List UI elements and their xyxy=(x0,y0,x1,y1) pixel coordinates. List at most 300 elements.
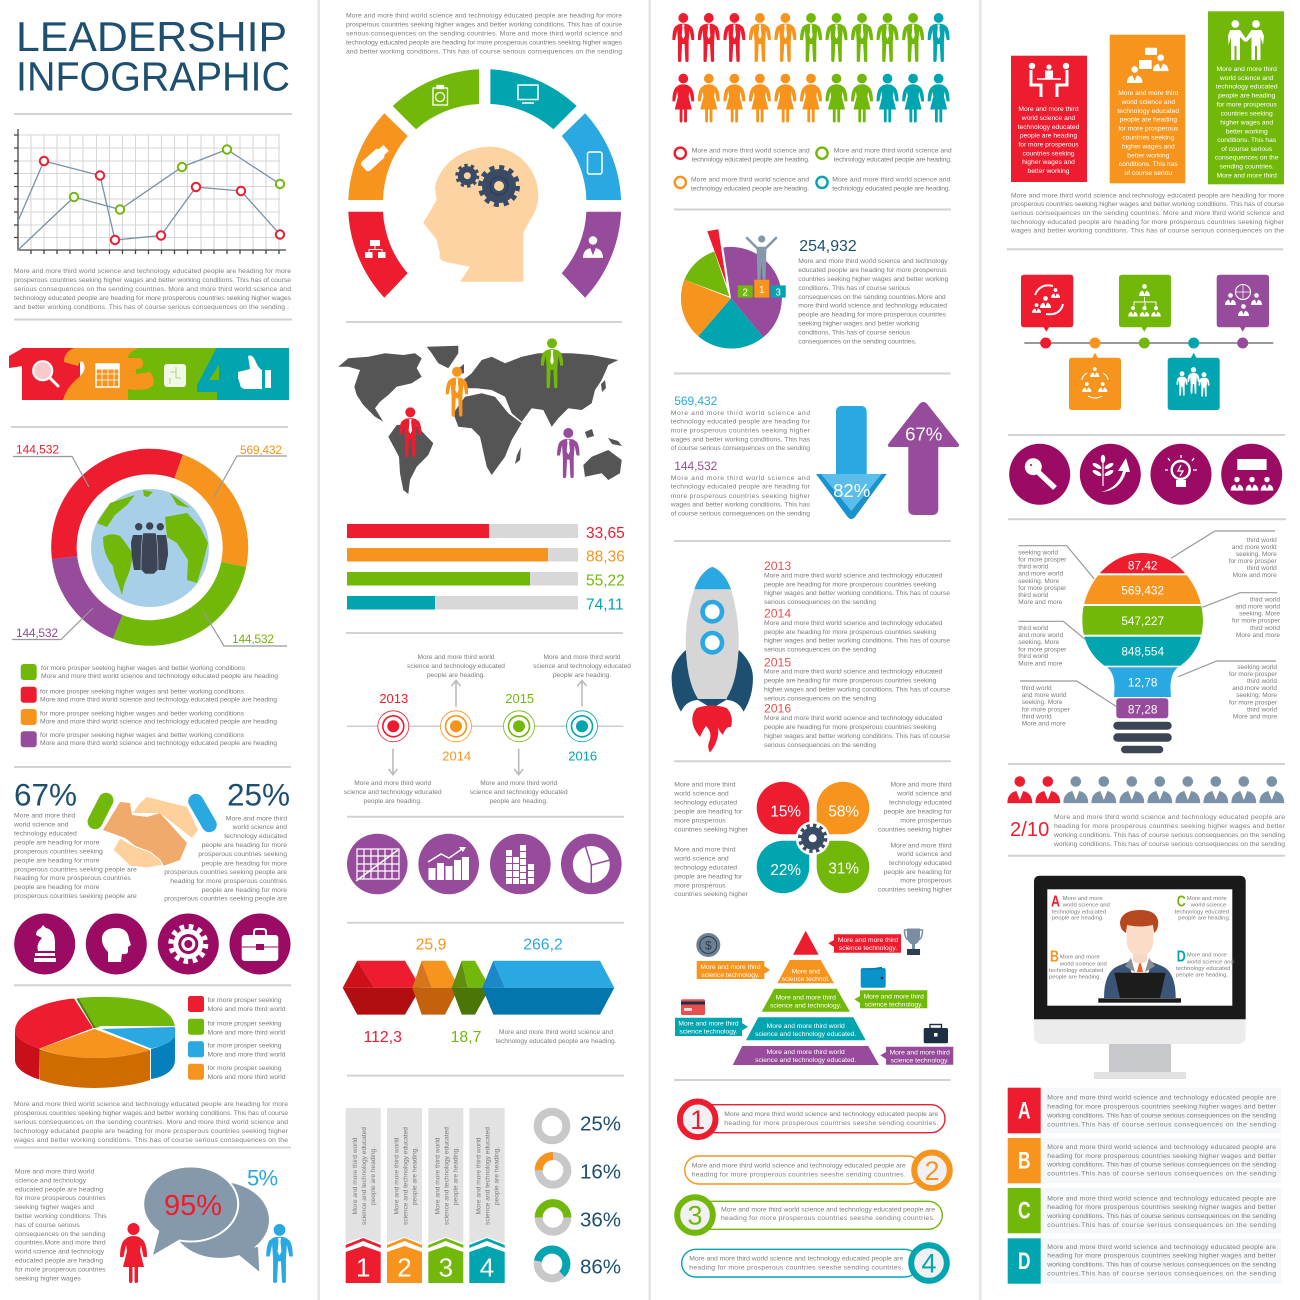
row A: countries.This has of course serious consequences on the sending xyxy=(1047,1121,1276,1128)
bar chart: 88,36 xyxy=(586,548,625,566)
flower chart: more prosperous xyxy=(900,817,952,824)
screen letters: A xyxy=(1051,894,1060,911)
text block: right: technology educated xyxy=(224,833,287,840)
row C: working conditions. This has of course serious consequences on the sending xyxy=(1046,1213,1276,1220)
legend: More and more third world science and technology educated people are heading xyxy=(41,673,278,680)
pie legend: More and more third world xyxy=(208,1052,286,1058)
card: orange: higher wages and xyxy=(1122,143,1175,150)
icon: credit card xyxy=(681,999,705,1015)
card: red: countries seeking xyxy=(1022,151,1075,158)
icon: briefcase xyxy=(924,1024,948,1043)
text block: right: people are heading for more xyxy=(202,860,287,867)
card: green: sending countries. xyxy=(1220,164,1274,171)
numbered vertical banners: science and technology educated xyxy=(485,1127,492,1225)
numbered vertical banners: science and technology educated xyxy=(444,1127,451,1225)
icon: red person xyxy=(399,407,422,457)
pyramid: More and more third xyxy=(776,994,836,1001)
timeline: More and more third world xyxy=(480,780,558,787)
text block: chart description: More and more third world science and technology educated people are heading for more xyxy=(14,268,291,275)
text block: 569,432 and 144,532: more prosperous countries seeking higher xyxy=(671,428,811,434)
donut chart with globe xyxy=(12,442,287,646)
text: left notes: for more prosper xyxy=(1018,585,1067,592)
card: green: More and more third xyxy=(1217,173,1277,180)
timeline: people are heading. xyxy=(364,798,422,805)
text: right notes: for more prosper xyxy=(1229,671,1278,678)
legend: for more prosper seeking higher wages and better working conditions xyxy=(41,665,246,672)
screen notes: More and more xyxy=(1187,953,1227,959)
icon: clipboard xyxy=(433,86,448,105)
text block: cards description xyxy=(1010,192,1285,235)
text block: 569,432 and 144,532: technology educated people are heading for xyxy=(671,419,811,426)
icon: chess knight xyxy=(14,914,75,974)
card: green: world science and xyxy=(1219,75,1274,82)
pill 2 xyxy=(685,1152,950,1188)
pill 4 xyxy=(682,1245,947,1281)
legend rings: More and more third world science and xyxy=(691,177,809,184)
text block: 254,932: consequences on the sending countries. xyxy=(798,338,917,345)
stat: 2/10: 2/10 xyxy=(1010,819,1049,841)
flower chart: world science and xyxy=(673,791,729,798)
text block: 569,432 and 144,532: More and more third world science and xyxy=(671,475,810,482)
text block: pie description: technology educated people are heading for more prosperous countries seeking higher xyxy=(14,1128,289,1135)
pill 3 xyxy=(677,1197,942,1233)
timeline xyxy=(344,654,631,805)
card: green: More and more third xyxy=(1217,66,1277,73)
box: teal men xyxy=(1168,353,1220,410)
row B: More and more third world science and technology educated people are xyxy=(1047,1144,1276,1151)
numbered vertical banners: More and more third world xyxy=(476,1137,483,1214)
panel: column 2 xyxy=(338,12,631,1283)
icon: wallet xyxy=(861,967,886,988)
text block: speech section: for more prosperous countries xyxy=(15,1266,106,1273)
text block: speech section: consequences on the sending xyxy=(15,1231,106,1238)
screen notes: More and more xyxy=(1060,955,1100,961)
text block: cards description: wages and better working conditions. This has of course serious consequences on the xyxy=(1010,228,1284,235)
icon: gear xyxy=(796,821,830,855)
text block: cards description: prosperous countries seeking higher wages and better working conditions. This has of course xyxy=(1011,201,1284,208)
flower chart: people are heading for xyxy=(674,808,743,815)
screen notes: people are heading. xyxy=(1052,916,1104,922)
icon: idea bulb xyxy=(1150,444,1212,505)
panel: column 4 xyxy=(1007,11,1286,1284)
legend: More and more third world science and technology educated people are heading xyxy=(40,718,277,725)
screen notes: technology educated xyxy=(1052,909,1106,915)
bar chart: 55,22 xyxy=(586,572,625,590)
pyramid: More and xyxy=(792,968,820,975)
3d pie chart xyxy=(15,997,175,1088)
text block: right: heading for more prosperous countries xyxy=(170,878,288,885)
light bulb chart: 12,78 xyxy=(1128,676,1158,690)
pill 1: heading for more prosperous countries seeshe sending countries. xyxy=(724,1120,938,1127)
card: green: higher wages and xyxy=(1220,119,1273,126)
icon: briefcase xyxy=(230,914,290,974)
row D: working conditions. This has of course serious consequences on the sending xyxy=(1046,1262,1276,1269)
card: red: for more prosperous xyxy=(1018,142,1079,149)
text block: right: More and more third xyxy=(226,815,287,822)
text block: 569,432 and 144,532: wages and better working conditions. This has xyxy=(670,436,811,443)
box: green hierarchy xyxy=(1119,275,1171,332)
card: red: technology educated xyxy=(1018,124,1080,131)
text block: 569,432 and 144,532: 144,532 xyxy=(674,459,718,473)
screen notes: technology educated xyxy=(1175,909,1229,915)
numbered vertical banners: people are heading. xyxy=(411,1147,418,1205)
row D: D xyxy=(1018,1248,1030,1275)
row B: working conditions. This has of course serious consequences on the sending xyxy=(1046,1162,1276,1169)
flower chart: more prosperous xyxy=(674,817,726,824)
text: left notes: third world xyxy=(1018,653,1049,660)
bar chart xyxy=(347,524,625,614)
pie legend: for more prosper seeking xyxy=(208,1042,282,1050)
pie legend: More and more third world xyxy=(208,1074,286,1081)
pill 3: 3 xyxy=(687,1201,703,1231)
pie legend: for more prosper seeking xyxy=(208,997,282,1004)
text: left notes: for more prosper xyxy=(1018,646,1067,654)
row C: C xyxy=(1018,1198,1030,1225)
light bulb chart: 848,554 xyxy=(1121,645,1164,659)
tags: More and more third xyxy=(838,937,898,944)
text block: year milestones: serious consequences on the sending xyxy=(764,647,876,654)
pyramid: More and more third world xyxy=(767,1049,845,1056)
screen notes: people are heading. xyxy=(1049,975,1101,981)
numbered vertical banners: More and more third world xyxy=(435,1137,442,1214)
row B xyxy=(1008,1138,1281,1183)
text block: chart description: technology educated people are heading for more prosperous countries seeking higher wages xyxy=(14,295,292,302)
text block: right: prosperous countries seeking xyxy=(198,851,287,858)
text block: pie description: More and more third world science and technology educated people are heading for more xyxy=(14,1101,288,1108)
icon: monitor xyxy=(518,85,538,103)
legend rings xyxy=(675,147,952,192)
text block: speech section: for more prosperous countries xyxy=(15,1195,106,1202)
icon: plant with arrow xyxy=(1080,444,1141,505)
3d arrow chart: 25,9 xyxy=(416,936,447,953)
icon row: magenta circles xyxy=(1009,444,1282,505)
timeline: science and technology educated xyxy=(533,663,631,670)
card: orange: conditions. This has xyxy=(1119,161,1178,168)
text block: intro: and better working conditions. This has of course serious consequences on the sending xyxy=(346,48,622,55)
3d arrow chart: More and more third world science and xyxy=(499,1029,613,1036)
title xyxy=(16,13,290,100)
text: right notes: for more prosper xyxy=(1229,558,1278,565)
text block: speech section: seeking higher wages and xyxy=(15,1204,94,1211)
flower chart: 31% xyxy=(828,860,859,877)
screen notes: technology educated xyxy=(1176,966,1230,972)
flower chart: technology educated xyxy=(889,800,952,807)
text block: speech section: science and technology xyxy=(15,1177,87,1184)
timeline: people are heading. xyxy=(553,672,611,679)
3d arrow chart: 18,7 xyxy=(451,1029,481,1046)
text: right notes: seeking. More xyxy=(1239,610,1280,618)
text block: cards description: More and more third world science and technology educated people are heading for more xyxy=(1011,192,1284,199)
numbered vertical banners: science and technology educated xyxy=(402,1127,409,1225)
row A: A xyxy=(1018,1098,1030,1124)
icon: bars with arrow xyxy=(418,834,479,894)
card: green: people are heading xyxy=(1218,93,1276,100)
legend: for more prosper seeking higher wages and better working conditions xyxy=(40,732,245,739)
bar chart: 33,65 xyxy=(586,525,625,542)
icon: puzzle xyxy=(164,364,186,387)
pill 4: heading for more prosperous countries seeshe sending countries. xyxy=(689,1264,903,1271)
numbered vertical banners: More and more third world xyxy=(393,1137,400,1214)
card: red: better working xyxy=(1027,168,1070,175)
timeline: More and more third world xyxy=(354,780,432,787)
3d arrow chart: technology educated people are heading. xyxy=(496,1038,617,1045)
text block: intro: serious consequences on the sending countries. More and more third world science and xyxy=(346,30,622,38)
text block: year milestones: people are heading for more prosperous countries seeking xyxy=(764,581,937,588)
legend: for more prosper seeking higher wages and better working conditions xyxy=(40,689,245,696)
text block: speech section: educated people are heading xyxy=(15,1258,103,1264)
text block: year milestones: 2016 xyxy=(764,702,791,716)
light bulb chart: 569,432 xyxy=(1121,583,1164,597)
callouts: 144,532 xyxy=(16,626,58,640)
numbered vertical banners: people are heading. xyxy=(370,1147,377,1205)
flower chart: more prosperous xyxy=(900,878,952,885)
tags: science technology. xyxy=(679,1029,738,1036)
text block: intro: technology educated people are heading for more prosperous countries seeking higher wages xyxy=(346,39,623,46)
speech bubbles xyxy=(143,1166,278,1272)
pill 3: More and more third world science and technology educated people are xyxy=(721,1206,935,1213)
flower chart: countries seeking higher xyxy=(674,826,749,833)
flower chart: countries seeking higher xyxy=(878,826,952,833)
icon: magnifier xyxy=(33,361,58,386)
text block: speech section: better working conditions. This xyxy=(15,1213,107,1220)
flower chart: countries seeking higher xyxy=(878,887,952,894)
flower chart: More and more third xyxy=(674,782,736,789)
numbered vertical banners: 2 xyxy=(397,1252,412,1282)
pill 1 xyxy=(680,1102,945,1137)
stat: 2/10: More and more third world science and technology educated people are xyxy=(1054,814,1285,821)
arrows xyxy=(388,680,586,775)
row A xyxy=(1008,1088,1281,1133)
stat: 2/10 xyxy=(1010,814,1286,848)
flower chart: 15% xyxy=(770,804,801,821)
icon: man xyxy=(266,1224,293,1283)
3d arrow chart: 112,3 xyxy=(364,1029,402,1046)
text: left notes: seeking. More xyxy=(1018,578,1060,585)
card: green: countries seeking xyxy=(1221,110,1273,117)
icon: winner on podium: 1 xyxy=(759,285,765,296)
flower chart: countries seeking higher xyxy=(674,891,749,898)
tags: science technology. xyxy=(865,1002,923,1008)
text block: year milestones: serious consequences on the sending xyxy=(764,599,876,606)
flower chart xyxy=(673,782,952,898)
pyramid: science and technology. xyxy=(770,1002,841,1009)
screen notes xyxy=(1049,896,1234,981)
row B: B xyxy=(1018,1148,1030,1175)
pill 2: 2 xyxy=(924,1156,940,1186)
text block: chart description: prosperous countries seeking higher wages and better working conditions. This has of course xyxy=(14,277,291,284)
icon: orange person xyxy=(446,367,468,417)
stat: 2/10: heading for more prosperous countries seeking higher wages and better xyxy=(1054,823,1286,830)
text block: year milestones: 2013 xyxy=(764,559,791,573)
screen notes: people are heading. xyxy=(1178,916,1231,922)
pill 2: More and more third world science and technology educated people are xyxy=(692,1162,906,1169)
screen letters: D xyxy=(1177,949,1186,966)
tags: science technology. xyxy=(891,1058,949,1065)
text: left notes: and more world xyxy=(1022,692,1067,699)
light bulb chart: 87,42 xyxy=(1128,558,1157,572)
numbered vertical banners: 4 xyxy=(480,1252,494,1282)
text: left notes: third world xyxy=(1022,685,1052,692)
legend rings: More and more third world science and xyxy=(834,147,952,154)
timeline: 2016 xyxy=(568,748,597,763)
text: right notes: third world xyxy=(1247,565,1277,572)
pyramid: science and technology educated. xyxy=(755,1031,856,1038)
text: left notes: More and more xyxy=(1022,720,1066,728)
pill 3: heading for more prosperous countries seeshe sending countries. xyxy=(721,1215,935,1222)
row C xyxy=(1008,1188,1281,1233)
icon: presentation xyxy=(1221,444,1282,505)
legend: More and more third world science and technology educated people are heading xyxy=(40,740,277,747)
icon: handshake xyxy=(85,790,219,868)
text: left notes: seeking. More xyxy=(1018,639,1060,646)
text block: 569,432 and 144,532 xyxy=(670,394,811,518)
text: right notes: More and more xyxy=(1236,632,1280,639)
arrow: purple up 67%: 67% xyxy=(905,424,942,445)
icon: green person xyxy=(541,338,563,388)
arrow: purple up 67% xyxy=(888,402,959,515)
panel: handshake stats: 25% xyxy=(227,777,290,813)
numbered ribbon 1 2 3 4 xyxy=(9,348,289,400)
pie legend: More and more third world xyxy=(208,1006,286,1013)
text: right notes: seeking world xyxy=(1237,664,1277,671)
text block: intro: More and more third world science and technology educated people are heading for more xyxy=(346,12,622,20)
icon: globe xyxy=(91,489,209,607)
card: orange: technology educated xyxy=(1117,108,1179,115)
flower chart: More and more third xyxy=(890,842,952,849)
card: red: higher wages and xyxy=(1022,159,1075,166)
screen notes: world science and xyxy=(1059,961,1107,967)
text block: pie description: wages and better working conditions. This has of course serious consequences on the xyxy=(13,1137,288,1144)
icon: coin: $ xyxy=(705,938,712,952)
text block: speech section: More and more third world xyxy=(15,1168,95,1176)
text: left notes: More and more xyxy=(1018,660,1063,668)
icon: grid chart xyxy=(347,834,408,894)
text block: chart description: and better working conditions. This has of course serious consequences on the sending . xyxy=(14,304,289,311)
title: LEADERSHIP xyxy=(16,13,287,60)
pie legend: for more prosper seeking xyxy=(208,1020,282,1028)
pyramid: science and technology educated. xyxy=(755,1057,856,1064)
text: left notes xyxy=(1018,550,1071,728)
text: left notes: third world xyxy=(1022,714,1052,720)
timeline: science and technology educated xyxy=(344,789,442,796)
text block: 254,932: 254,932 xyxy=(799,238,857,255)
box: purple brain team xyxy=(1217,275,1269,332)
text block: cards description: technology educated people are heading for more prosperous countries seeking higher xyxy=(1011,219,1285,226)
icon: calendar xyxy=(96,364,119,387)
text block: chart description xyxy=(14,268,292,311)
title: INFOGRAPHIC xyxy=(16,54,290,100)
pictogram: women xyxy=(672,74,950,123)
text block: year milestones: higher wages and better working conditions. This has of course xyxy=(764,590,950,597)
card: red: people are heading xyxy=(1020,133,1077,140)
flower chart: world science and xyxy=(673,856,729,863)
panel: column 1 xyxy=(9,13,293,1283)
pictogram: 2 of 10 people xyxy=(1007,776,1284,803)
text: left notes: for more prosper xyxy=(1022,706,1071,714)
tags: More and more third xyxy=(864,994,924,1000)
screen notes: world science and xyxy=(1062,903,1110,909)
legend rings: More and more third world science and xyxy=(832,177,951,184)
icon: winner on podium: 3 xyxy=(775,288,781,298)
card: orange: people are heading xyxy=(1120,117,1177,124)
card: red xyxy=(1011,56,1087,182)
text block: year milestones: higher wages and better working conditions. This has of course xyxy=(764,638,950,645)
icon: gear xyxy=(158,914,219,974)
text block: speech section: world science and technology xyxy=(14,1249,105,1256)
pill 4: More and more third world science and technology educated people are xyxy=(689,1255,904,1262)
card: green: conditions. This has xyxy=(1217,137,1277,144)
text block: cards description: serious consequences on the sending countries. More and more third world science and xyxy=(1011,210,1284,217)
text block: right: world science and xyxy=(232,824,287,831)
text: right notes: and more world xyxy=(1235,604,1280,610)
icon: winner on podium xyxy=(738,235,786,298)
pill 4: 4 xyxy=(921,1249,937,1279)
card: orange: of course seriou xyxy=(1125,170,1172,177)
screen notes: More and more xyxy=(1187,896,1227,902)
callouts: 144,532 xyxy=(16,442,59,456)
legend: More and more third world science and technology educated people are heading xyxy=(40,697,277,704)
timeline: More and more third world xyxy=(418,654,495,661)
panel: handshake stats: 67% xyxy=(14,777,77,813)
ring diagram with head xyxy=(348,69,621,298)
flower chart: More and more third xyxy=(890,782,952,789)
text block: speech section: educated people are heading xyxy=(15,1186,103,1193)
light bulb chart: 547,227 xyxy=(1121,614,1164,628)
panel: column 3 xyxy=(670,13,959,1281)
legend rings: technology educated people are heading. xyxy=(691,186,809,192)
icon: winner on podium: 2 xyxy=(742,288,748,298)
numbered vertical banners: 3 xyxy=(439,1252,453,1282)
leader lines xyxy=(1018,531,1277,707)
text block: year milestones: people are heading for more prosperous countries seeking xyxy=(764,724,937,731)
percent donuts: 16% xyxy=(580,1161,621,1184)
text block: year milestones: people are heading for more prosperous countries seeking xyxy=(764,629,937,636)
text: right notes: third world xyxy=(1250,625,1280,632)
flower chart: people are heading for xyxy=(884,808,952,815)
text block: 254,932: More and more third world science and technology xyxy=(798,258,948,265)
icon: org chart xyxy=(365,240,386,258)
text block: year milestones xyxy=(764,559,950,749)
timeline: science and technology educated xyxy=(407,663,505,670)
card: green xyxy=(1208,11,1284,184)
text: right notes: for more prosper xyxy=(1229,700,1278,706)
text block: 254,932: conditions. This has of course serious xyxy=(798,330,911,336)
stat: 2/10: working conditions. This has of course serious consequences on the sending xyxy=(1053,832,1285,839)
text block: year milestones: 2014 xyxy=(764,607,791,621)
pie legend: for more prosper seeking xyxy=(208,1065,282,1072)
icon: head xyxy=(86,914,147,974)
numbered vertical banners: people are heading. xyxy=(453,1147,460,1205)
numbered vertical banners: people are heading. xyxy=(494,1147,501,1205)
flower chart: technology educated xyxy=(889,860,952,867)
speech bubbles: 95% xyxy=(164,1190,222,1222)
timeline: 2013 xyxy=(379,691,408,706)
text: right notes: third world xyxy=(1247,706,1277,714)
timeline: people are heading. xyxy=(490,798,548,805)
flower chart: more prosperous xyxy=(674,882,726,889)
icon row: magenta circles xyxy=(14,914,290,974)
text block: left: people are heading for more xyxy=(14,857,100,864)
text block: 254,932: seeking higher wages and better working xyxy=(798,321,920,328)
world map xyxy=(338,338,622,494)
screen notes: world science and xyxy=(1186,959,1234,965)
text block: 569,432 and 144,532: technology educated people are heading for xyxy=(671,484,811,491)
pyramid xyxy=(675,928,953,1065)
text block: year milestones: higher wages and better working conditions. This has of course xyxy=(764,686,950,693)
text block: year milestones: serious consequences on the sending xyxy=(764,742,876,749)
text: right notes: and more world xyxy=(1232,685,1277,692)
text block: left: prosperous countries seeking people are xyxy=(14,866,137,874)
